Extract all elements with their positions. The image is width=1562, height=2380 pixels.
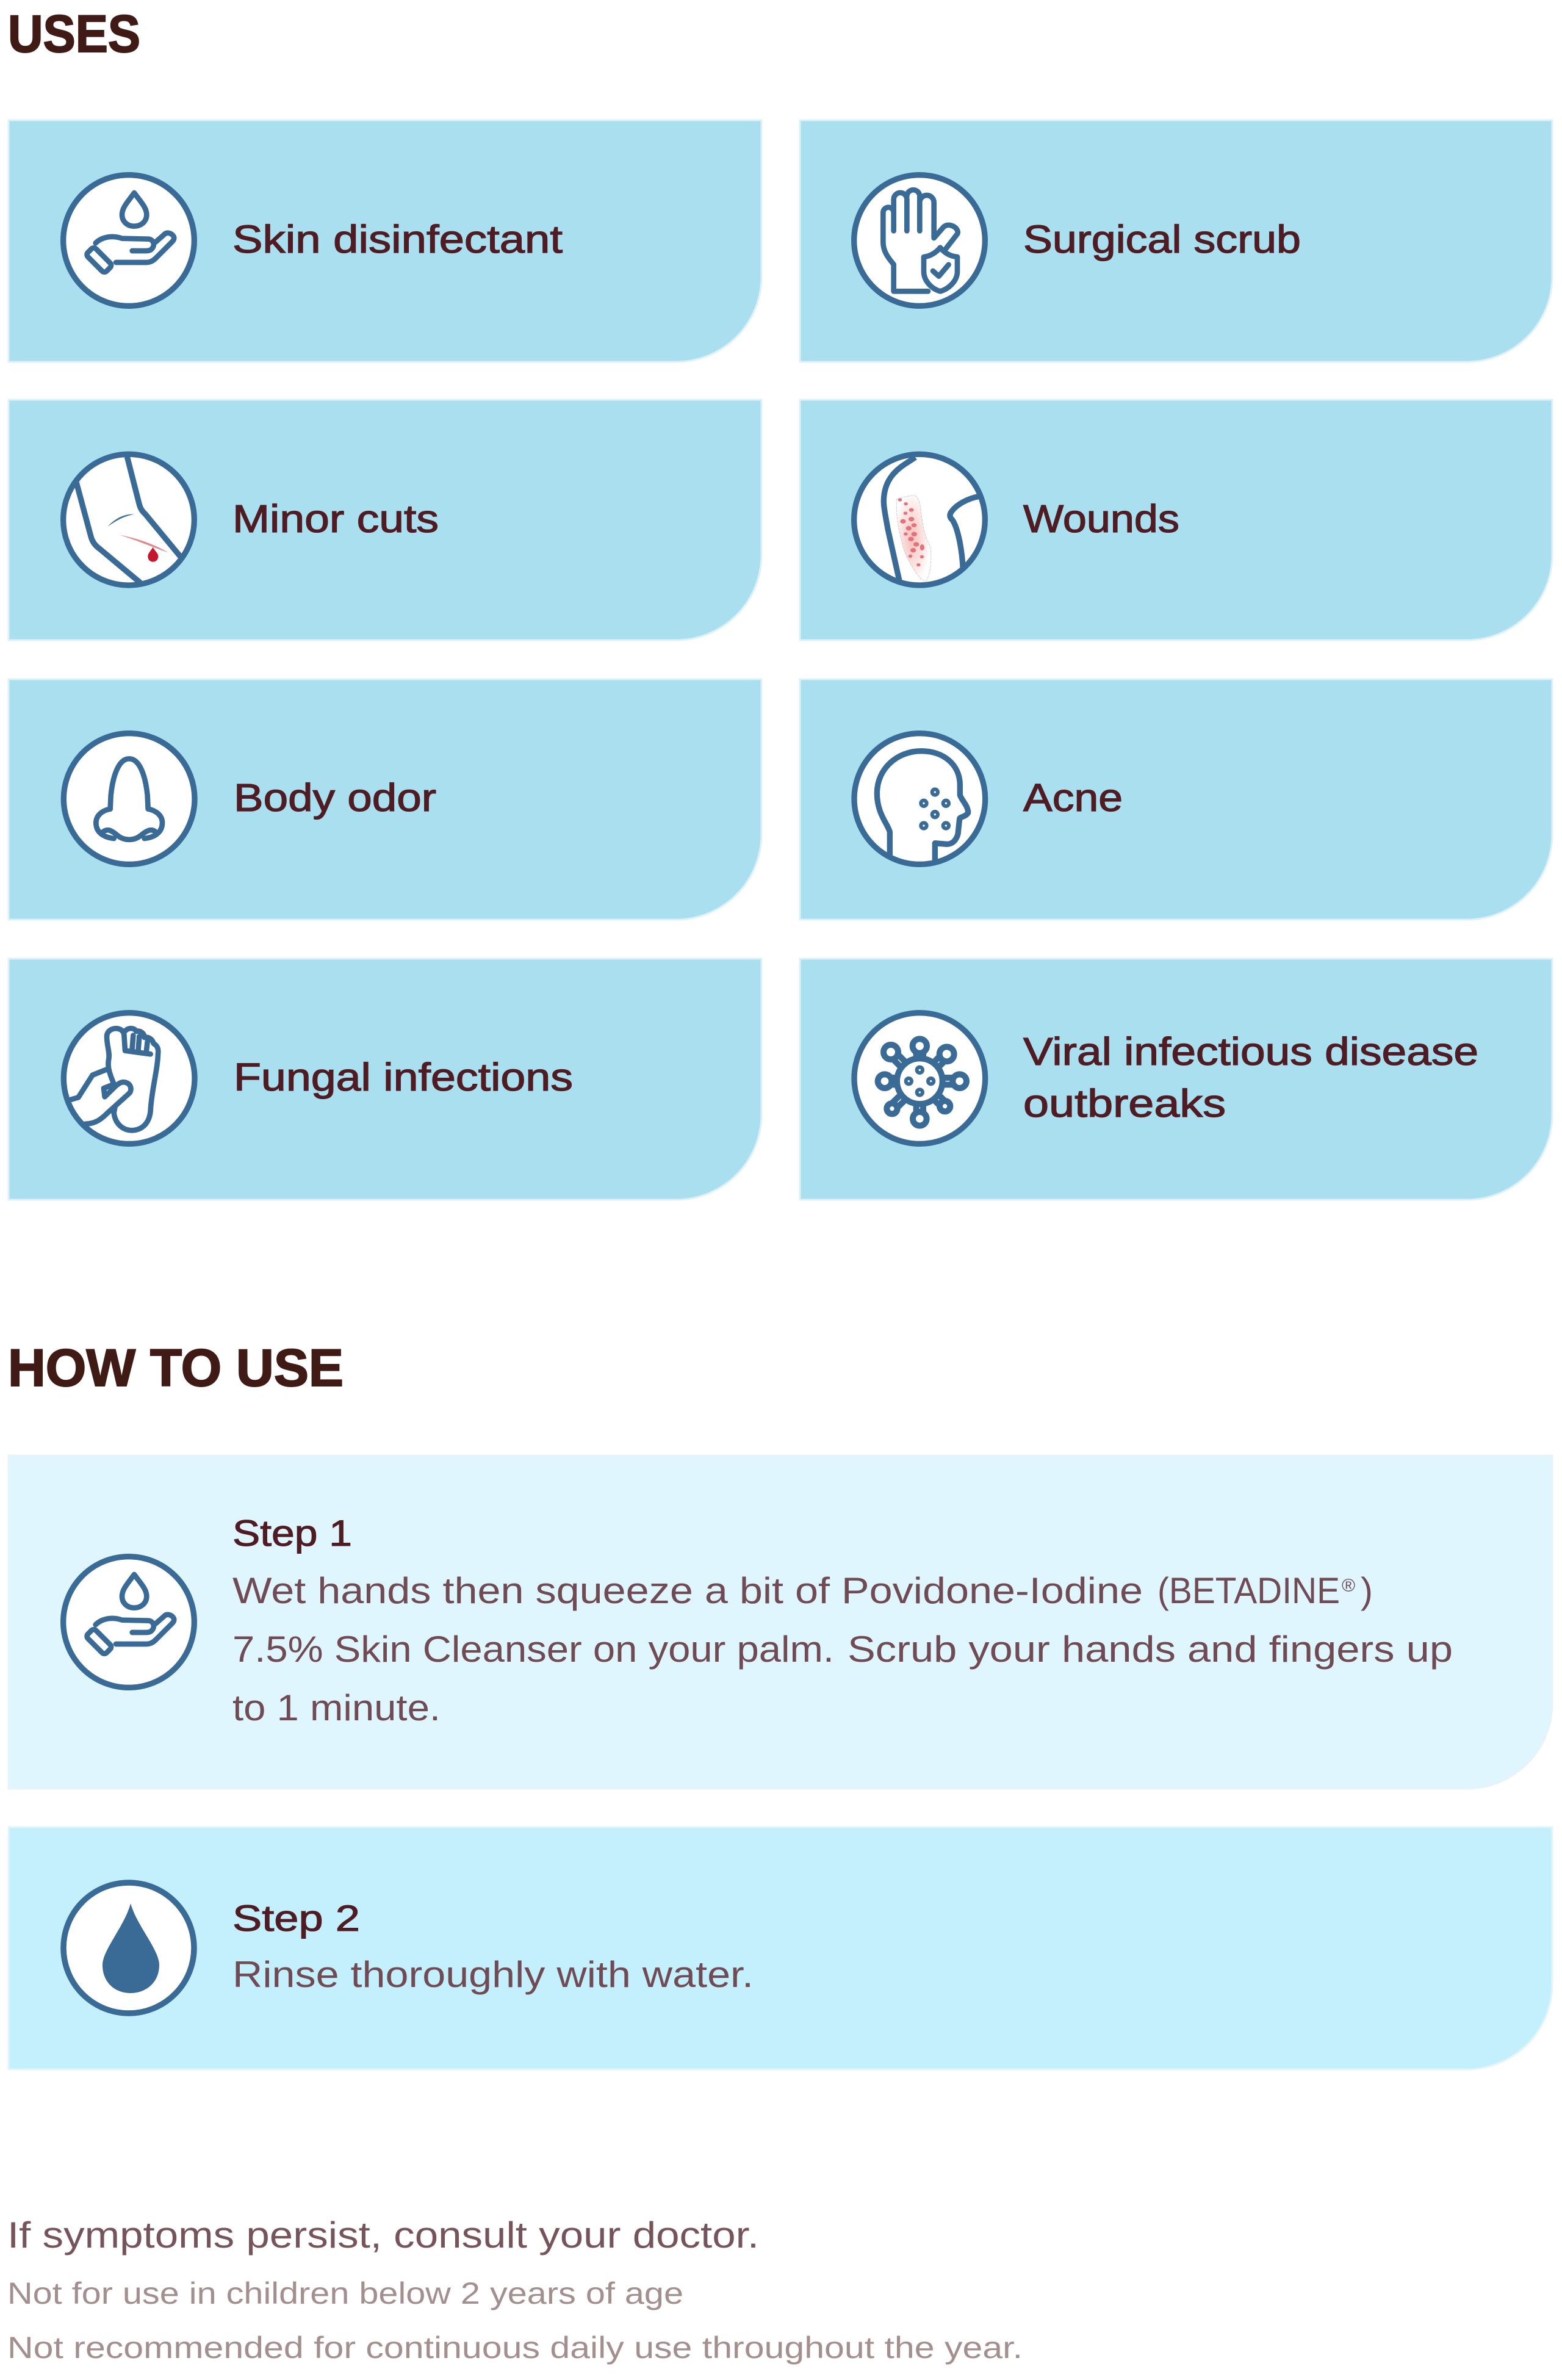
icon: hand with water drop <box>63 175 194 306</box>
panel: acne <box>800 679 1552 920</box>
label: wounds: Wounds <box>1023 497 1179 541</box>
footnote: daily use warning: Not recommended for continuous daily use throughout the year. <box>7 2331 1023 2365</box>
heading: uses: USES <box>8 5 140 63</box>
step 1 instructions: Scrub your hands and fingers up <box>848 1629 1453 1670</box>
panel: fungal infections <box>9 959 761 1200</box>
heading: how to use: HOW TO USE <box>8 1339 344 1397</box>
label: surgical scrub: Surgical scrub <box>1023 217 1301 261</box>
footnote: age warning: Not for use in children below 2 years of age <box>7 2276 683 2310</box>
step 1 instructions: ) <box>1361 1570 1373 1611</box>
label: minor cuts: Minor cuts <box>232 497 439 541</box>
icon: hand with water drop <box>63 1557 194 1687</box>
icon: elbow with cut <box>63 454 194 585</box>
icon: foot held by hand <box>63 1013 195 1144</box>
panel: step 1 <box>9 1455 1552 1789</box>
step 2 instructions: Rinse thoroughly with water. <box>232 1954 754 1995</box>
panel: viral infectious disease outbreaks <box>800 959 1552 1200</box>
label: viral infectious disease outbreaks <box>1023 1030 1478 1125</box>
panel: surgical scrub <box>800 120 1552 362</box>
step 1 instructions: 7.5% Skin Cleanser on your palm. <box>232 1629 834 1670</box>
label: viral infectious disease outbreaks: outbreaks <box>1023 1081 1226 1125</box>
panel: wounds <box>800 400 1552 640</box>
label: viral infectious disease outbreaks: Viral infectious disease <box>1023 1030 1478 1073</box>
icon: arm with rash <box>854 454 985 585</box>
label: fungal infections: Fungal infections <box>234 1055 573 1099</box>
step 1 instructions: to 1 minute. <box>232 1687 441 1728</box>
panel: step 2 <box>9 1827 1552 2069</box>
footnote: consult doctor: If symptoms persist, consult your doctor. <box>7 2215 759 2256</box>
step 2 title: Step 2 <box>232 1898 360 1939</box>
icon: water drop <box>63 1883 194 2013</box>
step 1 instructions: Wet hands then squeeze a bit of Povidone-Iodine <box>232 1570 1143 1611</box>
label: acne: Acne <box>1023 776 1123 820</box>
icon: nose <box>63 734 195 864</box>
icon: hand with shield <box>854 175 985 306</box>
panel: body odor <box>9 679 761 920</box>
step 1 instructions <box>232 1570 1453 1728</box>
panel: skin disinfectant <box>9 120 761 362</box>
panel: minor cuts <box>9 400 761 640</box>
icon: virus <box>854 1013 985 1144</box>
step 1 instructions: (BETADINE <box>1157 1570 1340 1611</box>
label: skin disinfectant: Skin disinfectant <box>232 217 563 261</box>
step 1 instructions: ® <box>1342 1576 1355 1596</box>
step 1 title: Step 1 <box>232 1513 352 1554</box>
label: body odor: Body odor <box>234 776 436 820</box>
icon: head with acne spots <box>854 734 985 864</box>
